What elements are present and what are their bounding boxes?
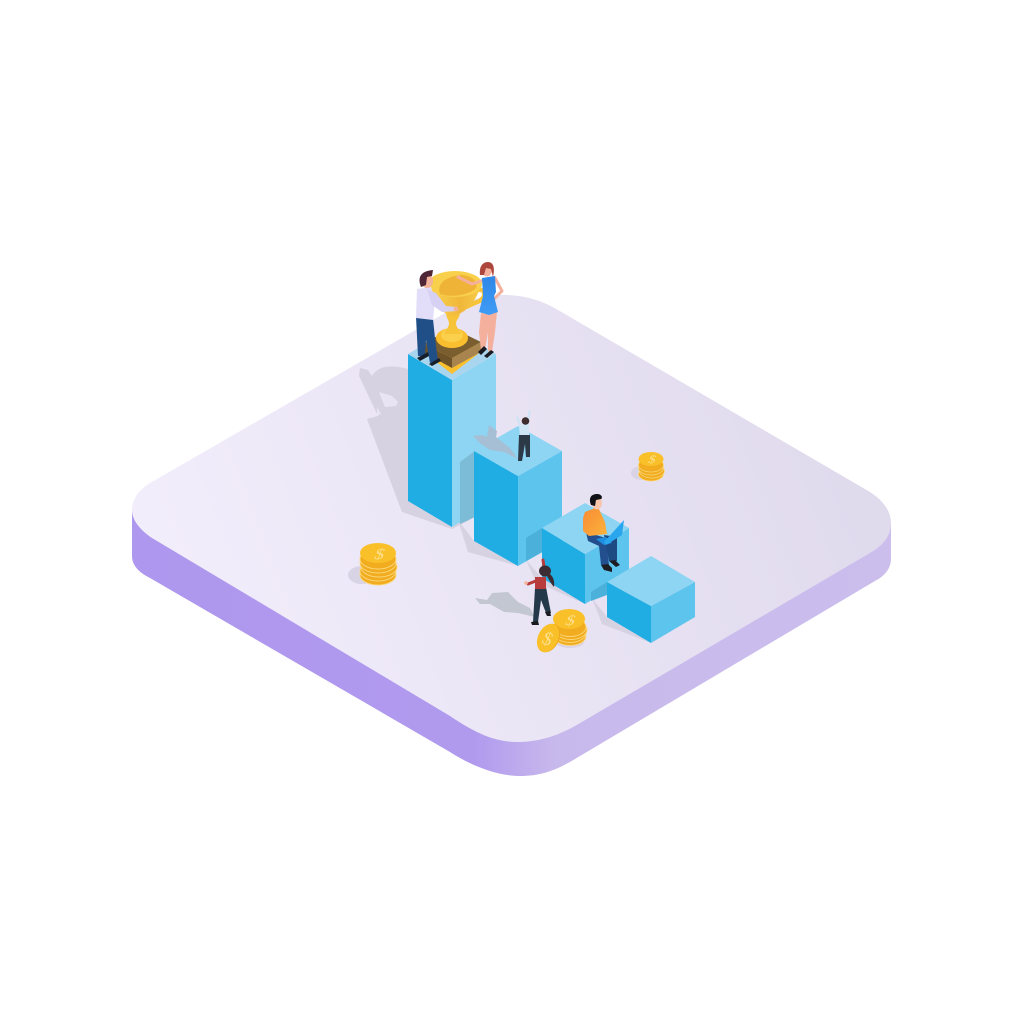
trousers [533, 587, 551, 622]
dollar sign: $ [563, 612, 578, 628]
head [482, 264, 492, 276]
bar 2 [474, 426, 562, 566]
bar 1 (tallest) [408, 328, 496, 527]
trophy on plinth [421, 271, 484, 374]
shirt [535, 577, 546, 589]
hair [420, 270, 433, 287]
shoes [601, 560, 620, 572]
hands [524, 581, 528, 585]
head [592, 496, 602, 510]
dollar sign: $ [539, 628, 556, 651]
bar 3 [542, 503, 629, 604]
head [421, 274, 433, 288]
shadow on bar 1 [460, 451, 475, 524]
platform top surface [132, 295, 891, 742]
sweater [583, 507, 607, 536]
man with laptop [583, 494, 624, 572]
legs [586, 532, 609, 565]
shirt [519, 424, 529, 437]
bar shadows on floor [359, 367, 651, 643]
platform side [132, 510, 891, 776]
head [522, 417, 529, 425]
legs [479, 312, 497, 352]
coins [554, 618, 587, 646]
gold plate [421, 332, 483, 374]
trophy cup [430, 283, 481, 316]
running woman shadow [475, 592, 535, 617]
dollar sign: $ [647, 453, 659, 466]
platform [132, 295, 891, 776]
hair [539, 566, 551, 576]
hand [454, 307, 458, 311]
bar 4 [607, 556, 695, 643]
coin stack: right [631, 452, 664, 481]
coins [638, 458, 664, 481]
trophy handle [466, 290, 484, 307]
trousers [416, 317, 438, 363]
shoes [531, 611, 551, 625]
arms [458, 277, 502, 301]
trophy base [436, 328, 468, 348]
cheering man on bar 2 [473, 410, 530, 461]
coin stack: front [553, 609, 587, 648]
hair [480, 262, 494, 277]
trousers [518, 435, 530, 461]
arms [517, 410, 530, 427]
shoes [417, 352, 441, 366]
shadow on bar 3 [591, 582, 607, 601]
coins [360, 549, 397, 585]
running woman [475, 560, 554, 625]
arms [528, 560, 545, 584]
trophy stem [444, 312, 461, 334]
laptop [596, 537, 612, 545]
woman with trophy [458, 262, 502, 358]
plinth [452, 342, 481, 368]
coin stack: left [348, 543, 397, 585]
man with trophy [416, 270, 458, 366]
hair [590, 494, 602, 506]
heels [478, 346, 494, 358]
shirt [416, 287, 435, 320]
shadow on bar 2 [526, 528, 542, 561]
dress [479, 276, 498, 315]
cheering man shadow [473, 425, 518, 459]
dollar sign: $ [372, 545, 388, 562]
standing coin [533, 620, 564, 656]
